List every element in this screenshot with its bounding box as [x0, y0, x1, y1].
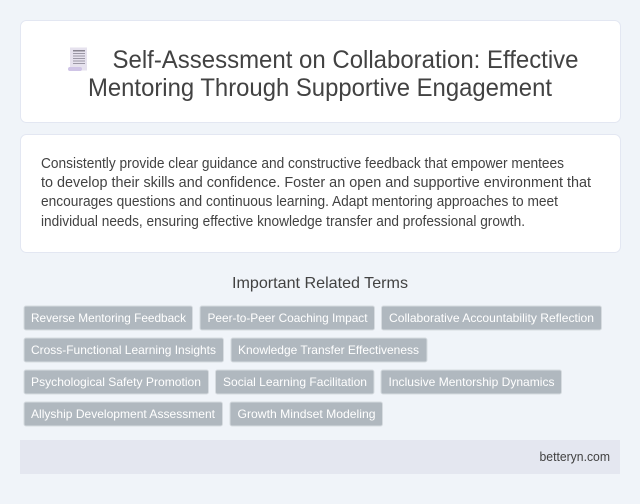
tag: Collaborative Accountability Reflection: [389, 311, 594, 325]
title text: Mentoring Through Supportive Engagement: [88, 74, 552, 102]
tag: Reverse Mentoring Feedback: [31, 311, 187, 325]
tag: [200, 306, 374, 330]
tag: Growth Mindset Modeling: [238, 407, 376, 421]
tag: Cross-Functional Learning Insights: [31, 343, 216, 357]
title text: [88, 46, 578, 102]
description text: individual needs, ensuring effective knowledge transfer and professional growth.: [41, 214, 525, 230]
tag: [230, 402, 382, 426]
tag: Psychological Safety Promotion: [31, 375, 201, 389]
tag: [24, 370, 208, 394]
tag: Allyship Development Assessment: [31, 407, 216, 421]
heading: related terms: Important Related Terms: [232, 275, 408, 292]
tag: [24, 402, 222, 426]
tag: [24, 306, 192, 330]
description text: [41, 156, 591, 230]
footer: [20, 440, 620, 474]
tag: [24, 338, 224, 362]
description text: to develop their skills and confidence. Foster an open and supportive environment that: [41, 175, 591, 191]
tag: [231, 338, 427, 362]
tag: Peer-to-Peer Coaching Impact: [208, 311, 368, 325]
tag: [382, 306, 602, 330]
icon: document scroll: [68, 48, 87, 71]
tag: [216, 370, 374, 394]
tags: [24, 306, 602, 426]
tag: Inclusive Mentorship Dynamics: [388, 375, 554, 389]
footer site name: betteryn.com: [540, 450, 610, 464]
panel: description: [20, 134, 620, 252]
description text: Consistently provide clear guidance and constructive feedback that empower mentees: [41, 156, 564, 172]
title text: Self-Assessment on Collaboration: Effective: [112, 46, 578, 74]
tag: Knowledge Transfer Effectiveness: [238, 343, 419, 357]
description text: encourages questions and continuous learning. Adapt mentoring approaches to meet: [41, 194, 558, 210]
tag: Social Learning Facilitation: [223, 375, 367, 389]
panel: title: [20, 20, 620, 122]
tag: [381, 370, 562, 394]
